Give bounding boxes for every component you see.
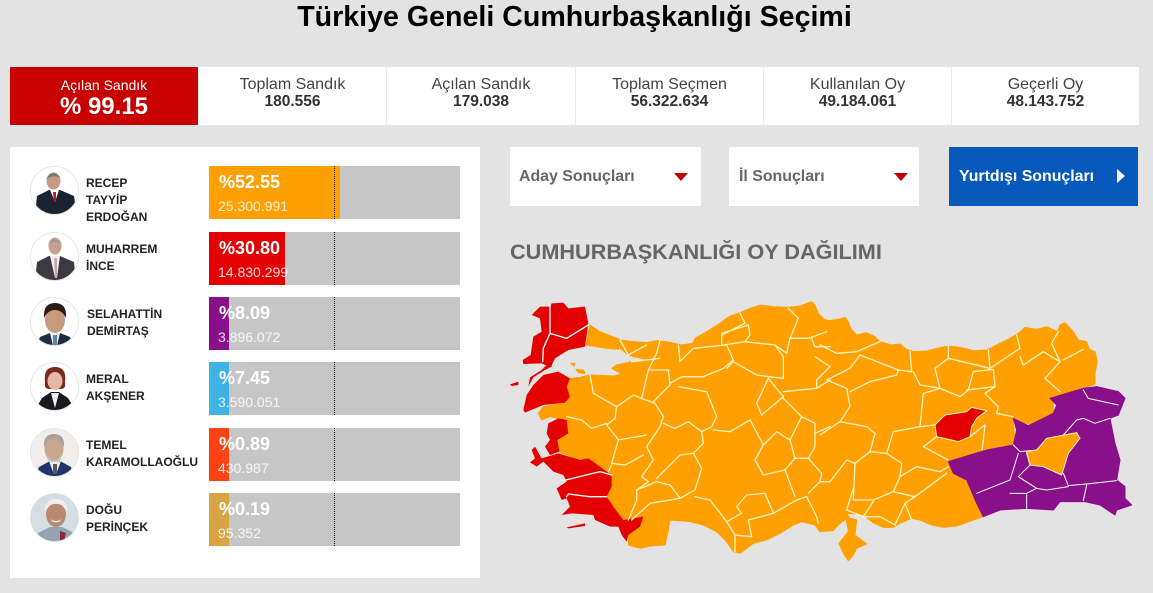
province borders: west and centre — [567, 308, 830, 552]
bar: Akşener 7.45: %7.45 — [219, 368, 270, 388]
name: İnce — [86, 242, 157, 273]
summary bar — [10, 67, 1139, 125]
name: Karamollaoğlu — [86, 438, 198, 469]
stat: total voters: Toplam Seçmen — [612, 76, 727, 93]
stat: valid votes: Geçerli Oy — [1008, 76, 1083, 93]
candidate: Erdoğan — [30, 166, 460, 224]
stat: votes cast: 49.184.061 — [819, 93, 896, 110]
stat: total ballot boxes — [199, 67, 386, 125]
map heading: CUMHURBAŞKANLIĞI OY DAĞILIMI — [510, 239, 882, 264]
portrait: Karamollaoğlu — [30, 428, 79, 477]
stat: total voters — [576, 67, 763, 125]
province won by Erdoğan inside the east — [1027, 433, 1080, 475]
bar: İnce 30.80: %30.80 — [219, 238, 280, 258]
provinces won by Demirtaş — [948, 387, 1132, 517]
bar: Erdoğan 52.55 — [209, 166, 460, 219]
portrait: Erdoğan — [30, 166, 79, 215]
name: Erdoğan: RECEP — [86, 176, 127, 190]
name: Demirtaş — [87, 307, 162, 338]
stat: total ballot boxes: Toplam Sandık — [240, 76, 345, 93]
name: Akşener: AKŞENER — [86, 389, 145, 403]
dropdown: province results: İl Sonuçları — [739, 168, 825, 185]
provinces won by Erdoğan — [538, 302, 1097, 561]
candidate: Demirtaş — [30, 297, 460, 350]
bar: Perinçek 0.19: %0.19 — [219, 499, 270, 519]
bar: Erdoğan 52.55: 25.300.991 — [218, 198, 288, 214]
stat: valid votes: 48.143.752 — [1007, 93, 1084, 110]
provinces won by İnce (west) — [510, 303, 643, 542]
stat: total voters: 56.322.634 — [631, 93, 708, 110]
stat: total ballot boxes: 180.556 — [264, 93, 321, 110]
bar: Akşener 7.45: 3.590.051 — [218, 394, 280, 410]
stat: votes cast — [764, 67, 951, 125]
stat: opened ballot box percent: Açılan Sandık — [61, 77, 147, 93]
candidate: Karamollaoğlu — [30, 428, 460, 481]
stat: opened ballot box percent — [10, 67, 198, 125]
portrait: Demirtaş — [30, 297, 79, 346]
candidate: Perinçek — [30, 493, 460, 546]
stat: votes cast: Kullanılan Oy — [810, 76, 905, 93]
bar: Karamollaoğlu 0.89: 430.987 — [218, 460, 269, 476]
portrait: Perinçek — [30, 493, 79, 542]
stat: opened ballot boxes — [387, 67, 575, 125]
candidate: Akşener — [30, 362, 460, 415]
name: Perinçek — [86, 503, 148, 534]
name: Erdoğan: ERDOĞAN — [86, 210, 147, 224]
name: Perinçek: PERİNÇEK — [86, 520, 148, 534]
bar: Erdoğan 52.55: %52.55 — [219, 172, 280, 192]
name: İnce: İNCE — [86, 259, 115, 273]
name: Demirtaş: SELAHATTİN — [87, 307, 162, 321]
name: Perinçek: DOĞU — [86, 503, 122, 517]
name: Akşener: MERAL — [86, 372, 129, 386]
portrait: İnce — [30, 232, 79, 281]
name: Karamollaoğlu: TEMEL — [86, 438, 127, 452]
dropdown: candidate results: Aday Sonuçları — [519, 168, 635, 185]
title: Türkiye Geneli Cumhurbaşkanlığı Seçimi — [297, 1, 852, 33]
stat: valid votes — [952, 67, 1139, 125]
province won by İnce (Tunceli) — [935, 407, 987, 442]
portrait: Akşener — [30, 362, 79, 411]
bar: Demirtaş 8.09 — [209, 297, 460, 350]
name: Erdoğan — [86, 176, 147, 224]
province borders: east — [820, 332, 1083, 525]
bar: İnce 30.80: 14.830.299 — [218, 264, 288, 280]
stat: opened ballot boxes: Açılan Sandık — [432, 76, 530, 93]
panel: candidate results — [10, 147, 480, 578]
bar: Karamollaoğlu 0.89 — [209, 428, 460, 481]
button: overseas results: Yurtdışı Sonuçları — [959, 168, 1094, 185]
stat: opened ballot box percent: % 99.15 — [60, 93, 148, 120]
bar: Demirtaş 8.09: %8.09 — [219, 303, 270, 323]
name: Akşener — [86, 372, 145, 403]
bar: Perinçek 0.19 — [209, 493, 460, 546]
bar: Demirtaş 8.09: 3.896.072 — [218, 329, 280, 345]
bar: Akşener 7.45 — [209, 362, 460, 415]
candidate: İnce — [30, 232, 460, 285]
button: overseas results — [949, 147, 1138, 206]
stat: opened ballot boxes: 179.038 — [453, 93, 509, 110]
bar: Karamollaoğlu 0.89: %0.89 — [219, 434, 270, 454]
bar: İnce 30.80 — [209, 232, 460, 285]
dropdown: province results — [729, 147, 919, 206]
name: Karamollaoğlu: KARAMOLLAOĞLU — [86, 455, 198, 469]
dropdown: candidate results — [510, 147, 701, 206]
name: Demirtaş: DEMİRTAŞ — [87, 324, 149, 338]
name: Erdoğan: TAYYİP — [86, 193, 127, 207]
name: İnce: MUHARREM — [86, 242, 157, 256]
bar: Perinçek 0.19: 95.352 — [218, 525, 261, 541]
